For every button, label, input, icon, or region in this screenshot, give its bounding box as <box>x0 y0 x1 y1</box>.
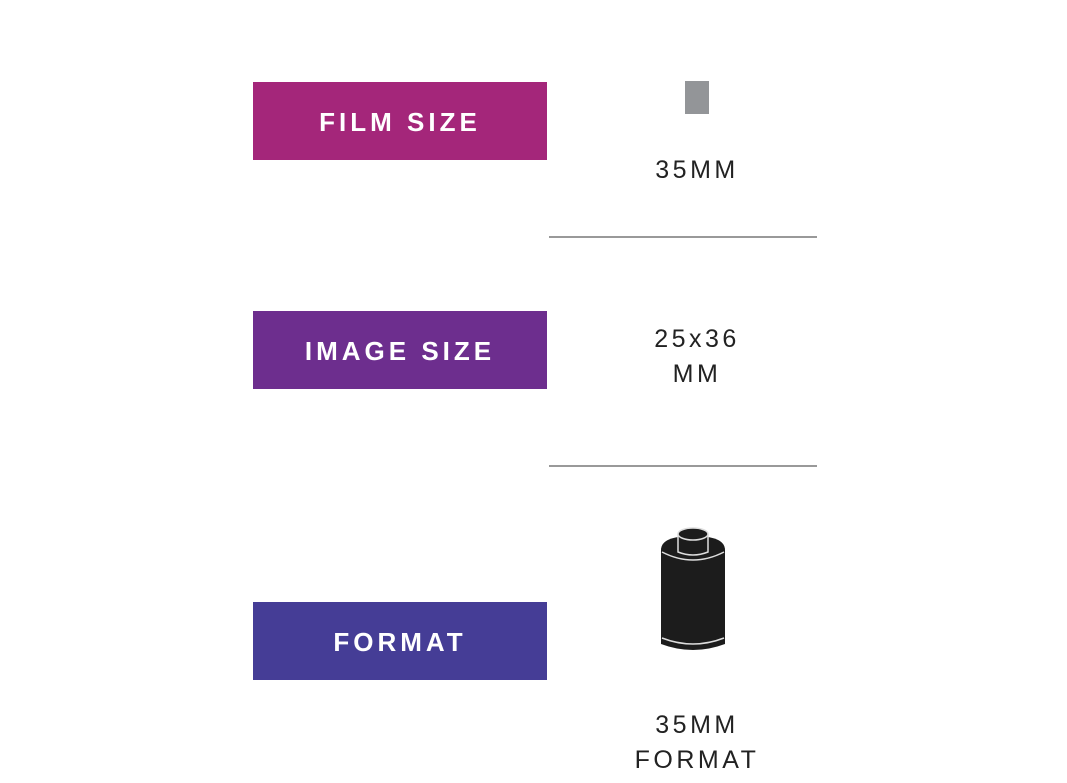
value: 35mm: 35MM <box>655 156 739 184</box>
label: film size: FILM SIZE <box>319 106 481 136</box>
value: 35mm format: FORMAT <box>635 746 759 774</box>
label: format <box>253 602 547 680</box>
label: format: FORMAT <box>333 626 467 656</box>
icon: film size swatch <box>685 81 709 114</box>
value: 35mm format <box>635 711 759 774</box>
value: 35mm format: 35MM <box>655 711 739 739</box>
value: 25x36 mm: 25x36 <box>654 325 740 353</box>
label: image size <box>253 311 547 389</box>
icon: film canister <box>661 527 725 650</box>
label: image size: IMAGE SIZE <box>305 336 495 366</box>
value: 25x36 mm <box>654 325 740 388</box>
label: film size <box>253 82 547 160</box>
value: 25x36 mm: MM <box>673 360 721 388</box>
